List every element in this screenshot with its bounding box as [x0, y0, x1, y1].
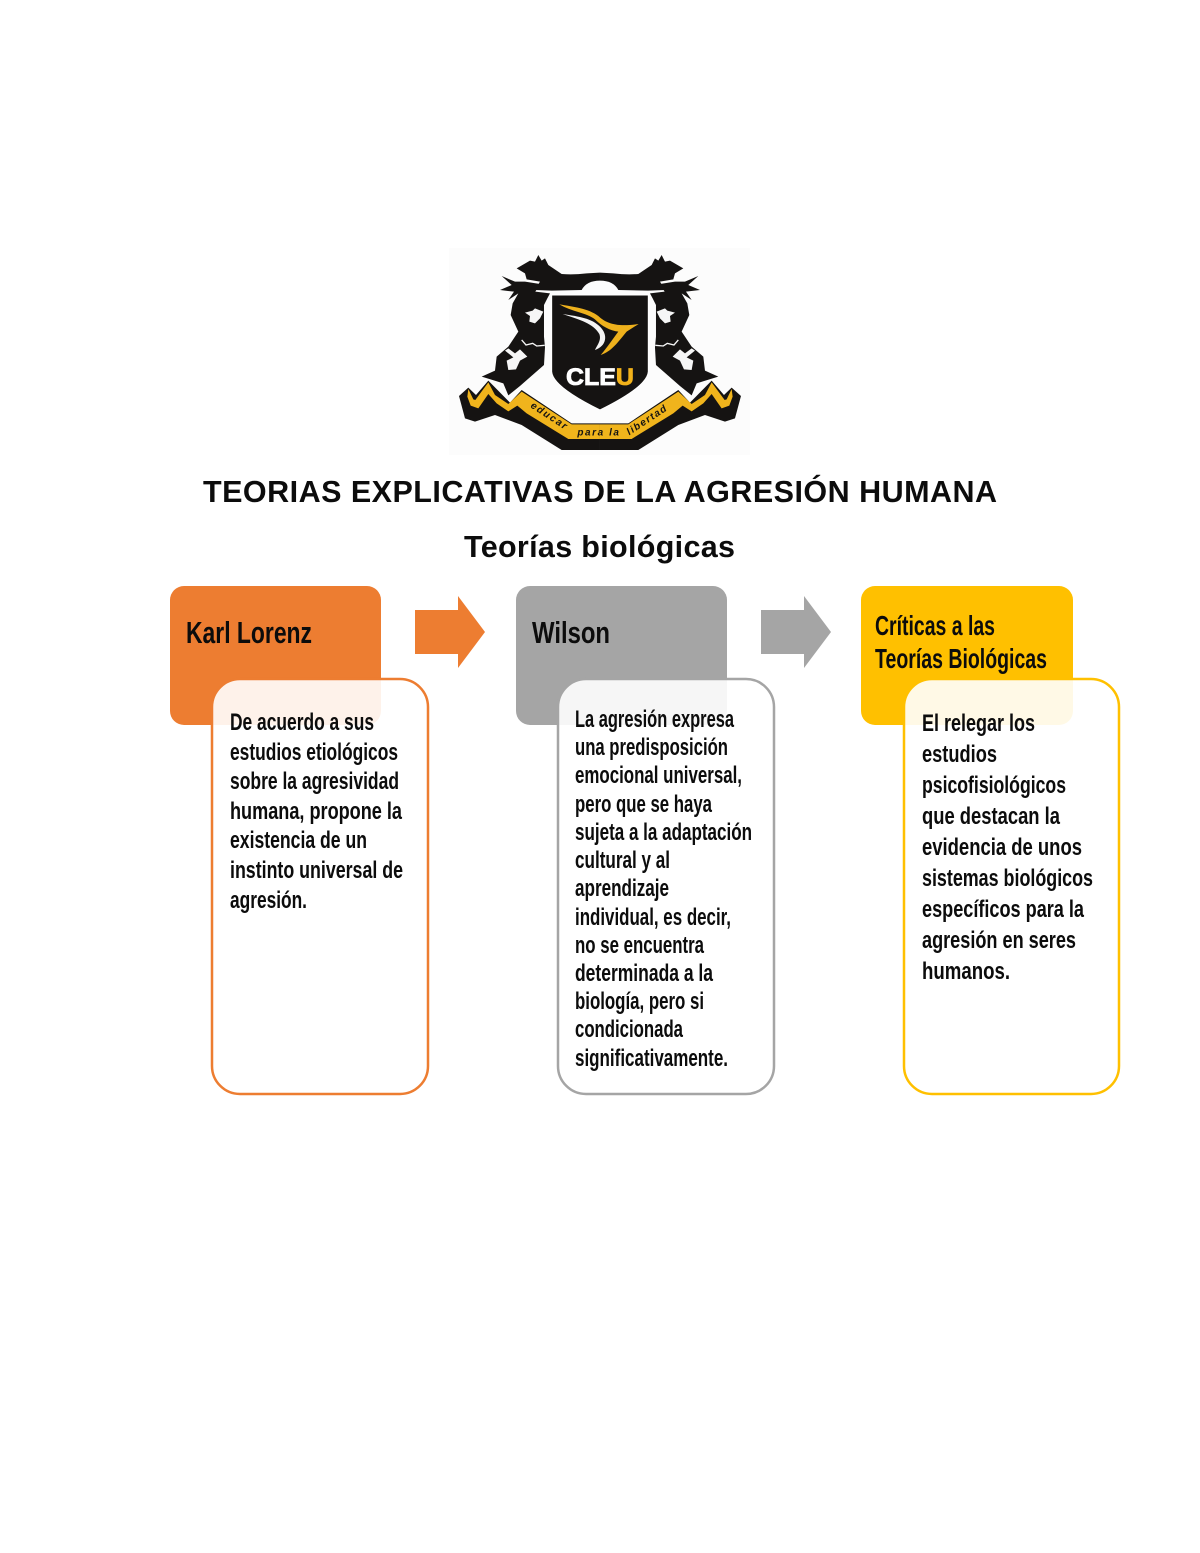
- text block: Críticas: [922, 710, 1093, 985]
- subtitle: Teorías biológicas: [464, 530, 735, 564]
- logo: CLEU crest: [459, 255, 741, 450]
- panel: Wilson: [516, 586, 774, 1094]
- text card: Karl Lorenz: [212, 679, 428, 1094]
- text block: Wilson: condicionada: [575, 1016, 683, 1043]
- text block: Karl Lorenz: [230, 709, 403, 914]
- text block: Karl Lorenz: estudios etiológicos: [230, 739, 398, 766]
- text block: Críticas: que destacan la: [922, 803, 1060, 830]
- icon: ribbon: libertad: [626, 404, 666, 436]
- text block: Wilson: emocional universal,: [575, 762, 742, 789]
- text block: Wilson: pero que se haya: [575, 791, 712, 818]
- icon: ribbon: para la: [576, 427, 620, 438]
- text card: Wilson: [558, 679, 774, 1094]
- text block: Wilson: aprendizaje: [575, 875, 669, 902]
- text block: Críticas: sistemas biológicos: [922, 865, 1093, 892]
- text block: Karl Lorenz: instinto universal de: [230, 857, 403, 884]
- text block: Karl Lorenz: sobre la agresividad: [230, 768, 399, 795]
- text block: Críticas: agresión en seres: [922, 927, 1076, 954]
- text block: Wilson: individual, es decir,: [575, 904, 731, 931]
- arrow: orange: [415, 596, 485, 668]
- text block: Karl Lorenz: humana, propone la: [230, 798, 402, 825]
- text block: Críticas: El relegar los: [922, 710, 1035, 737]
- heading: Wilson: Wilson: [532, 615, 610, 650]
- text block: Wilson: biología, pero si: [575, 988, 704, 1015]
- title: TEORIAS EXPLICATIVAS DE LA AGRESIÓN HUMANA: [203, 473, 997, 509]
- heading: Críticas a las Teorías Biológicas: Teorías Biológicas: [875, 643, 1047, 674]
- text block: Wilson: [575, 706, 752, 1072]
- text block: Wilson: significativamente.: [575, 1045, 728, 1072]
- text block: Críticas: evidencia de unos: [922, 834, 1082, 861]
- icon: dove: [559, 304, 639, 355]
- text block: Críticas: específicos para la: [922, 896, 1084, 923]
- panel: Críticas: [861, 586, 1119, 1094]
- header box: Críticas: [861, 586, 1073, 725]
- panel: Karl Lorenz: [170, 586, 428, 1094]
- text block: Wilson: no se encuentra: [575, 932, 704, 959]
- text block: Wilson: determinada a la: [575, 960, 713, 987]
- header box: Karl Lorenz: [170, 586, 381, 725]
- icon: ribbon: educar: [531, 404, 568, 428]
- heading: Karl Lorenz: Karl Lorenz: [186, 615, 312, 650]
- icon: griffins and top banner: [482, 255, 718, 395]
- text block: Wilson: una predisposición: [575, 734, 728, 761]
- text block: Karl Lorenz: existencia de un: [230, 827, 367, 854]
- text block: Wilson: sujeta a la adaptación: [575, 819, 752, 846]
- text block: Críticas: humanos.: [922, 958, 1010, 985]
- text block: Wilson: cultural y al: [575, 847, 670, 874]
- text block: Wilson: La agresión expresa: [575, 706, 734, 733]
- heading: Críticas a las Teorías Biológicas: [875, 610, 1047, 674]
- icon: ribbon: [459, 380, 741, 450]
- heading: Críticas a las Teorías Biológicas: Críticas a las: [875, 610, 995, 641]
- text card: Críticas: [904, 679, 1119, 1094]
- text block: Karl Lorenz: De acuerdo a sus: [230, 709, 374, 736]
- text: CLEU: CLEU: [566, 364, 634, 391]
- header box: Wilson: [516, 586, 727, 725]
- text block: Karl Lorenz: agresión.: [230, 887, 307, 914]
- text block: Críticas: estudios: [922, 741, 997, 768]
- icon: shield: [552, 295, 648, 410]
- text block: Críticas: psicofisiológicos: [922, 772, 1066, 799]
- arrow: grey: [761, 596, 831, 668]
